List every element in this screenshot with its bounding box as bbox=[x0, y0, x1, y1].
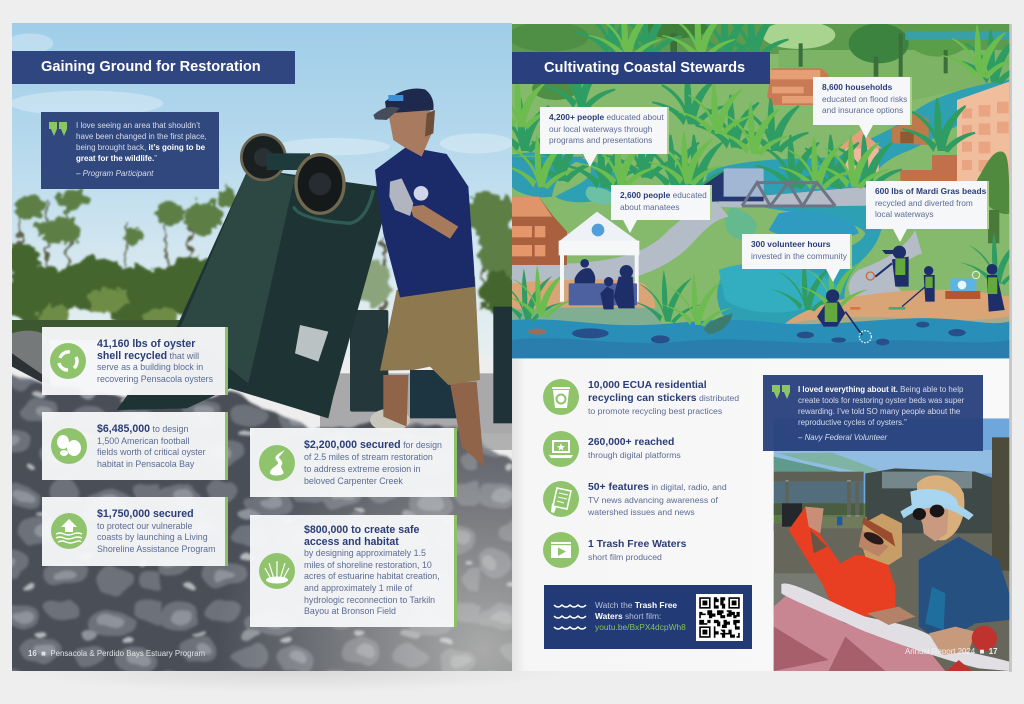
text: local waterways bbox=[875, 209, 934, 219]
page shadow bbox=[12, 671, 572, 693]
pavilion bbox=[779, 453, 879, 473]
card: oyster habitat funding bbox=[42, 412, 228, 480]
text: 41,160 lbs of oyster bbox=[97, 338, 195, 350]
text: 4,200+ people educated about bbox=[549, 112, 664, 122]
text: recycled and diverted from bbox=[875, 198, 973, 208]
text: educated on flood risks bbox=[822, 94, 907, 104]
quote text: rewarding. I’ve told SO many people about the bbox=[798, 407, 960, 416]
text: 1,500 American football bbox=[97, 436, 189, 446]
net bbox=[774, 593, 945, 671]
buildings bbox=[767, 68, 829, 105]
parked vehicle corner bbox=[12, 330, 42, 374]
text: TV news advancing awareness of bbox=[588, 495, 718, 505]
callout: watch the film bbox=[544, 585, 752, 649]
right tree bbox=[977, 152, 1009, 214]
text: our local waterways through bbox=[549, 124, 652, 134]
stat: digital reach bbox=[543, 431, 681, 467]
quote text: I loved everything about it. Being able to help bbox=[798, 385, 963, 394]
card: living shoreline funding bbox=[42, 497, 228, 566]
icon: waves bbox=[554, 604, 586, 630]
upper tree band bbox=[512, 24, 1009, 54]
text bbox=[822, 82, 907, 115]
text: Shoreline Assistance Program bbox=[97, 544, 215, 554]
quote text: – Navy Federal Volunteer bbox=[798, 433, 887, 442]
card: safe access and habitat bbox=[250, 515, 457, 627]
footer: right page: Annual Report 2024 ■ 17 bbox=[905, 647, 998, 656]
title: Cultivating Coastal Stewards bbox=[512, 52, 770, 84]
text: through digital platforms bbox=[588, 450, 681, 460]
sea life bbox=[572, 322, 966, 345]
text: short film produced bbox=[588, 552, 662, 562]
callout: 4,200+ people educated bbox=[540, 107, 669, 154]
tent bbox=[559, 212, 639, 242]
stat: news features bbox=[543, 481, 727, 517]
left page photo: volunteer lifting bin over oyster shells bbox=[12, 23, 512, 671]
text: recycling can stickers distributed bbox=[588, 393, 739, 404]
text: miles of shoreline restoration, 10 bbox=[304, 560, 432, 570]
quote text: have been changed in the first place, bbox=[76, 132, 207, 141]
icon: quote marks bbox=[772, 385, 790, 399]
trees bbox=[3, 189, 522, 331]
callout: 8,600 households bbox=[813, 77, 912, 125]
icon: recycling bin bbox=[543, 379, 579, 415]
illustration: coastal community map bbox=[512, 24, 1010, 358]
text: Bayou at Bronson Field bbox=[304, 606, 396, 616]
text bbox=[595, 600, 686, 632]
text: acres of estuarine habitat creation, bbox=[304, 571, 440, 581]
photo: volunteers with oyster net bbox=[774, 418, 1010, 671]
right page edge bbox=[1009, 24, 1012, 672]
card: oyster shell recycled bbox=[42, 327, 228, 395]
text: recovering Pensacola oysters bbox=[97, 374, 213, 384]
text: to protect our vulnerable bbox=[97, 521, 192, 531]
text: $6,485,000 to design bbox=[97, 423, 188, 435]
text: shell recycled that will bbox=[97, 350, 199, 362]
quote text: reproductive cycles of oysters.” bbox=[798, 418, 907, 427]
text bbox=[620, 190, 707, 212]
card: stream restoration funding bbox=[250, 428, 457, 497]
text: serve as a building block in bbox=[97, 362, 203, 372]
icon: winding stream bbox=[259, 445, 295, 481]
text: watershed issues and news bbox=[588, 507, 695, 517]
footer: left page: 16 ■ Pensacola & Perdido Bays Estuary Program bbox=[28, 649, 205, 658]
text bbox=[588, 482, 727, 517]
beaches bbox=[512, 280, 656, 310]
text: youtu.be/BxPX4dcpWh8 bbox=[595, 622, 686, 632]
title: Gaining Ground for Restoration bbox=[12, 51, 295, 84]
text bbox=[97, 508, 215, 554]
title: Cultivating Coastal Stewards: Cultivating Coastal Stewards bbox=[544, 60, 745, 76]
bin logo bbox=[295, 325, 328, 362]
volunteers bbox=[817, 246, 1005, 343]
bridge bbox=[742, 183, 835, 206]
quote text: – Program Participant bbox=[76, 169, 153, 178]
right page background bbox=[512, 24, 1009, 671]
callout: 600 lbs of beads bbox=[866, 181, 989, 229]
icon: house over waves bbox=[51, 513, 87, 549]
road and background bins bbox=[320, 373, 512, 450]
text: Watch the Trash Free bbox=[595, 600, 677, 610]
icon: oyster shells bbox=[51, 428, 87, 464]
tipped bin bbox=[117, 168, 392, 418]
icon: marsh grass bbox=[259, 553, 295, 589]
text: 600 lbs of Mardi Gras beads bbox=[875, 186, 986, 196]
icon: laptop bbox=[543, 431, 579, 467]
text: by designing approximately 1.5 bbox=[304, 548, 426, 558]
icon: quote marks bbox=[49, 122, 67, 136]
quote text bbox=[76, 121, 207, 178]
text: 2,600 people educated bbox=[620, 190, 707, 200]
stat: recycling can stickers bbox=[543, 379, 739, 416]
text: 10,000 ECUA residential bbox=[588, 380, 707, 391]
text: and approximately 1 mile of bbox=[304, 583, 412, 593]
text: of 2.5 miles of stream restoration bbox=[304, 452, 433, 462]
quote text: create tools for restoring oyster beds was super bbox=[798, 396, 964, 405]
text: access and habitat bbox=[304, 536, 399, 548]
text: coasts by launching a Living bbox=[97, 532, 208, 542]
text: hydrologic reconnection to Tarkiln bbox=[304, 595, 435, 605]
text bbox=[304, 439, 442, 486]
text: beloved Carpenter Creek bbox=[304, 476, 403, 486]
text bbox=[588, 437, 681, 460]
text bbox=[588, 380, 739, 416]
icon: video clapper bbox=[543, 532, 579, 568]
text: to promote recycling best practices bbox=[588, 406, 722, 416]
grass clumps bbox=[486, 2, 1024, 188]
text bbox=[751, 239, 847, 261]
outreach people bbox=[575, 259, 635, 309]
text: $1,750,000 secured bbox=[97, 508, 194, 520]
roads bbox=[512, 187, 922, 297]
text: programs and presentations bbox=[549, 135, 652, 145]
text: 260,000+ reached bbox=[588, 437, 674, 448]
text: and insurance options bbox=[822, 105, 903, 115]
volunteer bbox=[383, 375, 484, 467]
QR code bbox=[696, 594, 743, 641]
truck bbox=[704, 172, 724, 202]
text bbox=[549, 112, 664, 145]
bay water bbox=[512, 318, 1009, 358]
text: 50+ features in digital, radio, and bbox=[588, 482, 727, 493]
quote text: I love seeing an area that shouldn’t bbox=[76, 121, 200, 130]
text: 8,600 households bbox=[822, 82, 892, 92]
title: Gaining Ground for Restoration: Gaining Ground for Restoration bbox=[41, 59, 261, 75]
dumped shells at base bbox=[370, 409, 410, 428]
text: fields worth of critical oyster bbox=[97, 447, 206, 457]
left volunteer bbox=[789, 507, 895, 620]
text bbox=[304, 524, 440, 616]
water bbox=[774, 523, 1009, 671]
text: habitat in Pensacola Bay bbox=[97, 459, 194, 469]
text bbox=[97, 338, 213, 384]
callout: 2,600 people educated bbox=[611, 185, 712, 220]
text: 300 volunteer hours bbox=[751, 239, 831, 249]
lower grass bbox=[489, 232, 1024, 323]
river bbox=[706, 80, 1009, 333]
quote text bbox=[798, 385, 964, 442]
text: Waters short film: bbox=[595, 611, 661, 621]
text bbox=[588, 539, 686, 562]
icon: hand with document bbox=[543, 481, 579, 517]
icon: recycle bbox=[50, 343, 86, 379]
text: $800,000 to create safe bbox=[304, 524, 419, 536]
text: about manatees bbox=[620, 202, 680, 212]
text bbox=[875, 186, 986, 219]
quote text: great for the wildlife.” bbox=[76, 154, 157, 163]
callout: 300 volunteer hours bbox=[742, 234, 852, 269]
quote text: being brought back, it’s going to be bbox=[76, 143, 205, 152]
oyster pile bbox=[12, 372, 512, 671]
text: invested in the community bbox=[751, 251, 847, 261]
text bbox=[97, 423, 206, 469]
quote: program participant bbox=[41, 112, 219, 189]
right volunteer bbox=[919, 537, 1009, 643]
text: $2,200,000 secured for design bbox=[304, 439, 442, 451]
text: 1 Trash Free Waters bbox=[588, 539, 686, 550]
quote: Navy Federal volunteer bbox=[763, 375, 983, 451]
stat: short film bbox=[543, 532, 686, 568]
text: to address extreme erosion in bbox=[304, 464, 421, 474]
